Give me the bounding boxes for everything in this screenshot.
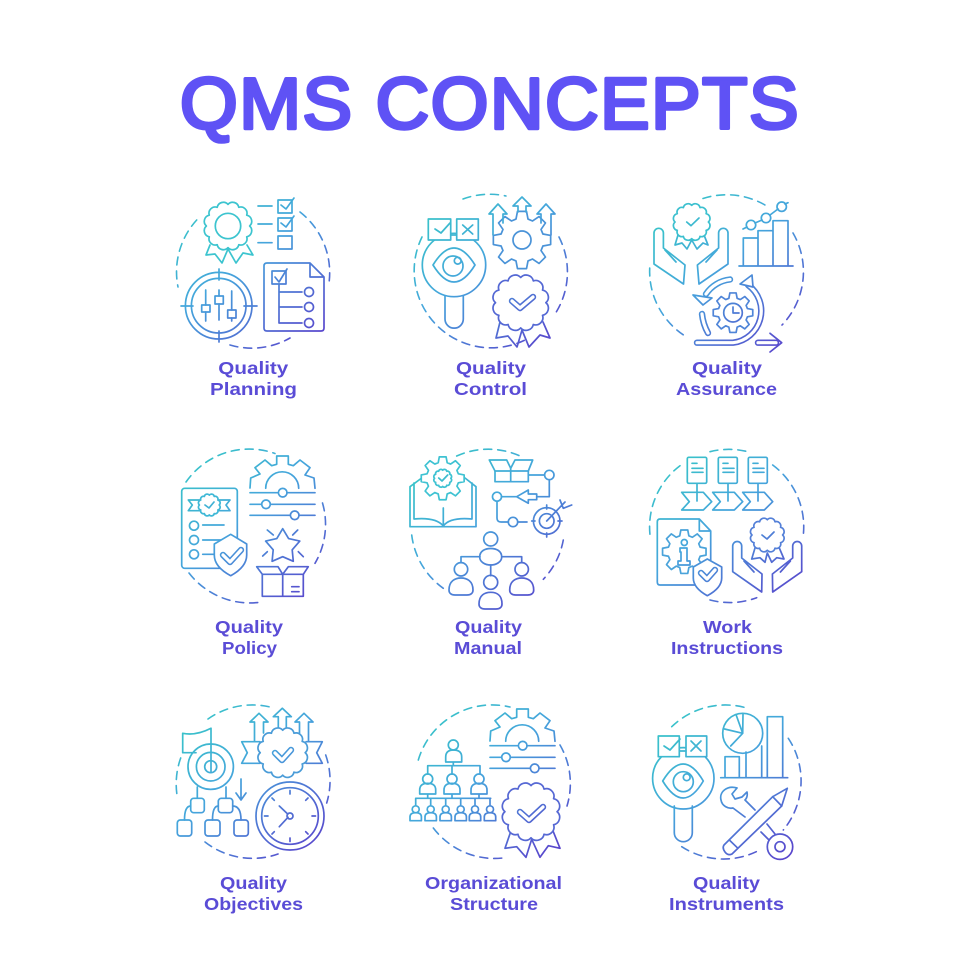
dashed ring <box>186 449 326 603</box>
icon: quality rosette <box>502 783 560 857</box>
icon: rosette with ribbon and arrows <box>242 708 322 777</box>
icon: magnifier with eye <box>653 748 714 842</box>
icon: document checklist <box>264 263 324 331</box>
panel: work instructions <box>650 449 804 658</box>
icon: open book with gear <box>410 457 476 527</box>
icon: clock <box>256 782 324 850</box>
label: Quality <box>218 358 289 378</box>
dashed ring <box>176 705 330 858</box>
label <box>676 358 777 399</box>
label: Quality <box>455 617 522 637</box>
label: Control <box>454 379 527 399</box>
icon: half gear with sliders <box>490 709 555 773</box>
panel: organizational structure <box>410 705 570 914</box>
icon: hands holding rosette <box>654 204 728 284</box>
label: Manual <box>454 638 522 658</box>
dashed ring <box>672 705 801 859</box>
icon: pass and fail boxes <box>658 736 707 757</box>
label: Quality <box>456 358 526 378</box>
panel: quality instruments <box>653 705 801 914</box>
dashed ring <box>414 194 567 348</box>
icon: documents feeding process chevrons <box>682 457 773 510</box>
icon: quality rosette <box>493 275 550 347</box>
dashed ring <box>177 212 330 348</box>
label: Quality <box>220 873 287 893</box>
panel: quality manual <box>410 449 572 658</box>
label <box>210 358 297 399</box>
icon: team hierarchy <box>449 532 534 609</box>
label <box>669 873 784 914</box>
label: Quality <box>692 358 762 378</box>
icon: star over open box <box>257 529 308 596</box>
icon: gear with growth arrows <box>489 197 555 269</box>
label: Instructions <box>671 638 783 658</box>
label <box>454 617 522 658</box>
label <box>204 873 303 914</box>
label: Instruments <box>669 894 784 914</box>
icon: wrench and pencil <box>721 787 793 859</box>
icon: box to target process flow <box>489 460 572 537</box>
label: Planning <box>210 379 297 399</box>
label <box>454 358 527 399</box>
icon: flag on target <box>183 728 233 789</box>
label <box>425 873 562 914</box>
icon: organization chart <box>410 740 496 821</box>
icon: half gear with sliders <box>250 456 315 520</box>
dashed ring <box>412 449 563 588</box>
icon: pass and fail boxes <box>428 219 478 240</box>
label: Structure <box>450 894 538 914</box>
label <box>215 617 283 658</box>
icon: pie and bar chart <box>721 713 788 778</box>
icon: target with sliders <box>181 269 257 342</box>
icon: checklist boxes <box>258 198 294 249</box>
panel: quality policy <box>182 449 326 658</box>
icon: hands holding rosette <box>733 518 802 592</box>
label: Quality <box>693 873 760 893</box>
panel: quality objectives <box>176 705 330 914</box>
icon: shield with check <box>214 534 247 576</box>
label: Organizational <box>425 873 562 893</box>
icon: magnifier with eye <box>422 233 486 328</box>
panel: quality control <box>414 194 567 399</box>
dashed ring <box>650 195 803 336</box>
dashed ring <box>650 449 804 603</box>
icon: bar chart with trend line <box>739 202 793 266</box>
label: Assurance <box>676 379 777 399</box>
dashed ring <box>418 705 570 858</box>
icon: info document with gear <box>657 519 711 585</box>
icon: objective tree <box>177 779 248 836</box>
label: Quality <box>215 617 283 637</box>
label <box>671 617 783 658</box>
panel: quality planning <box>177 198 330 399</box>
label: Work <box>703 617 752 637</box>
icon: policy document <box>182 488 237 568</box>
icon: award rosette <box>204 202 253 263</box>
title: QMS CONCEPTS <box>180 64 800 144</box>
panel: quality assurance <box>650 195 803 399</box>
icon: shield with check <box>693 559 722 596</box>
label: Objectives <box>204 894 303 914</box>
label: Policy <box>222 638 277 658</box>
icon: gear clock with cycle arrows <box>693 275 782 352</box>
